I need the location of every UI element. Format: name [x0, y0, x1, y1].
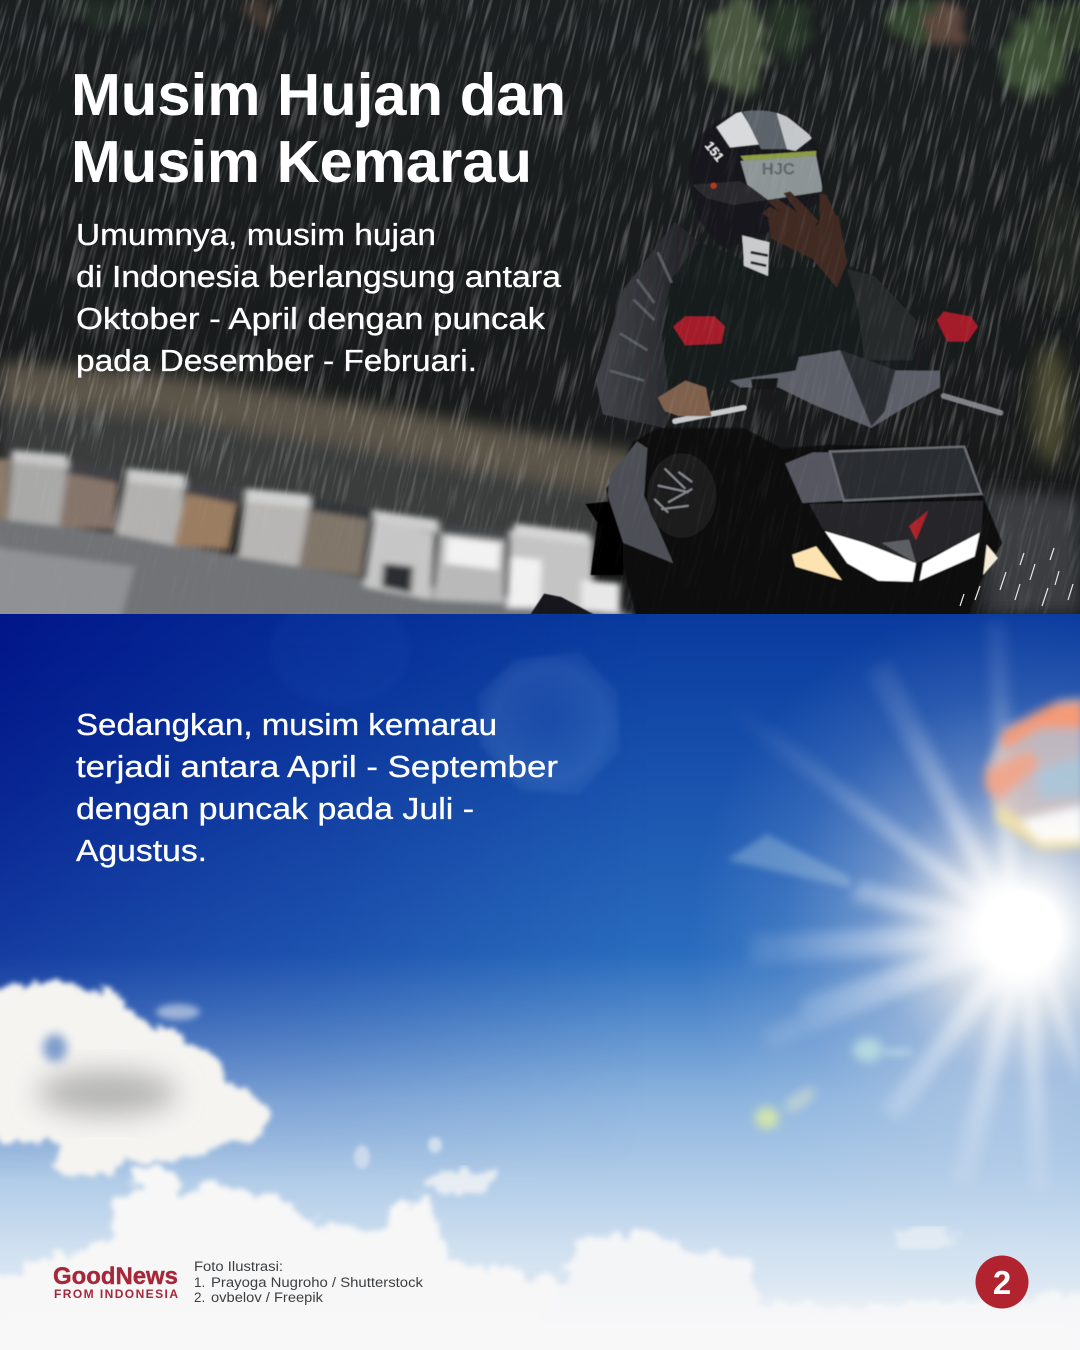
lens flares: [270, 595, 914, 1129]
photo credits: 1.: [194, 1275, 205, 1290]
title: Musim Kemarau: [71, 129, 532, 195]
background rain streaks: [0, 0, 1080, 614]
rainbow flare: [985, 698, 1080, 850]
photo credits: [194, 1259, 423, 1305]
text block: dry season: terjadi antara April - September: [76, 749, 558, 784]
hand on grip: [658, 381, 711, 416]
panel: rainy season photo: [0, 0, 1080, 614]
title: Musim Hujan dan: [71, 62, 566, 128]
text block: rainy season: Umumnya, musim hujan: [76, 217, 436, 252]
title: [71, 62, 566, 195]
foreground rain streaks: [0, 0, 1080, 532]
photo credits: ovbelov / Freepik: [211, 1290, 323, 1305]
left cloud: [0, 980, 272, 1177]
logo: GoodNews from Indonesia: FROM INDONESIA: [54, 1287, 178, 1301]
photo credits: Prayoga Nugroho / Shutterstock: [211, 1275, 423, 1290]
text block: dry season: Sedangkan, musim kemarau: [76, 707, 497, 742]
road spray: [960, 548, 1073, 606]
photo credits: 2.: [194, 1290, 205, 1305]
logo: GoodNews from Indonesia: GoodNews: [53, 1263, 178, 1290]
page number badge: 2: [993, 1264, 1011, 1301]
road barrier and wet road: [0, 450, 633, 627]
motorcyclist: [530, 107, 1002, 617]
foliage background: [60, 0, 1080, 97]
helmet: [689, 107, 823, 276]
rider jacket: [596, 222, 916, 428]
helmet number sticker: 151: [702, 138, 727, 164]
windshield and handlebars: [675, 327, 1000, 428]
motorcycle body: [530, 428, 1002, 617]
text block: rainy season: [76, 217, 562, 378]
tree trunk and embankment: [0, 190, 1080, 614]
red emblem: [909, 511, 928, 540]
helmet brand on visor: HJC: [762, 161, 795, 178]
headlights: [792, 531, 998, 582]
text block: rainy season: Oktober - April dengan puncak: [76, 301, 546, 336]
page number badge: [976, 1256, 1028, 1308]
mirrors: [673, 311, 978, 345]
sun: [724, 618, 1080, 1188]
text block: dry season: [76, 707, 558, 868]
license plate: [830, 447, 981, 501]
panel: dry season sky: [0, 595, 1080, 1350]
lower cloud bank: [0, 1137, 1080, 1350]
raised hand: [763, 191, 847, 288]
text block: dry season: Agustus.: [76, 833, 207, 868]
text block: rainy season: pada Desember - Februari.: [76, 343, 477, 378]
clouds: [0, 980, 1080, 1350]
photo credits: Foto Ilustrasi:: [194, 1259, 283, 1274]
text block: rainy season: di Indonesia berlangsung antara: [76, 259, 562, 294]
text block: dry season: dengan puncak pada Juli -: [76, 791, 474, 826]
